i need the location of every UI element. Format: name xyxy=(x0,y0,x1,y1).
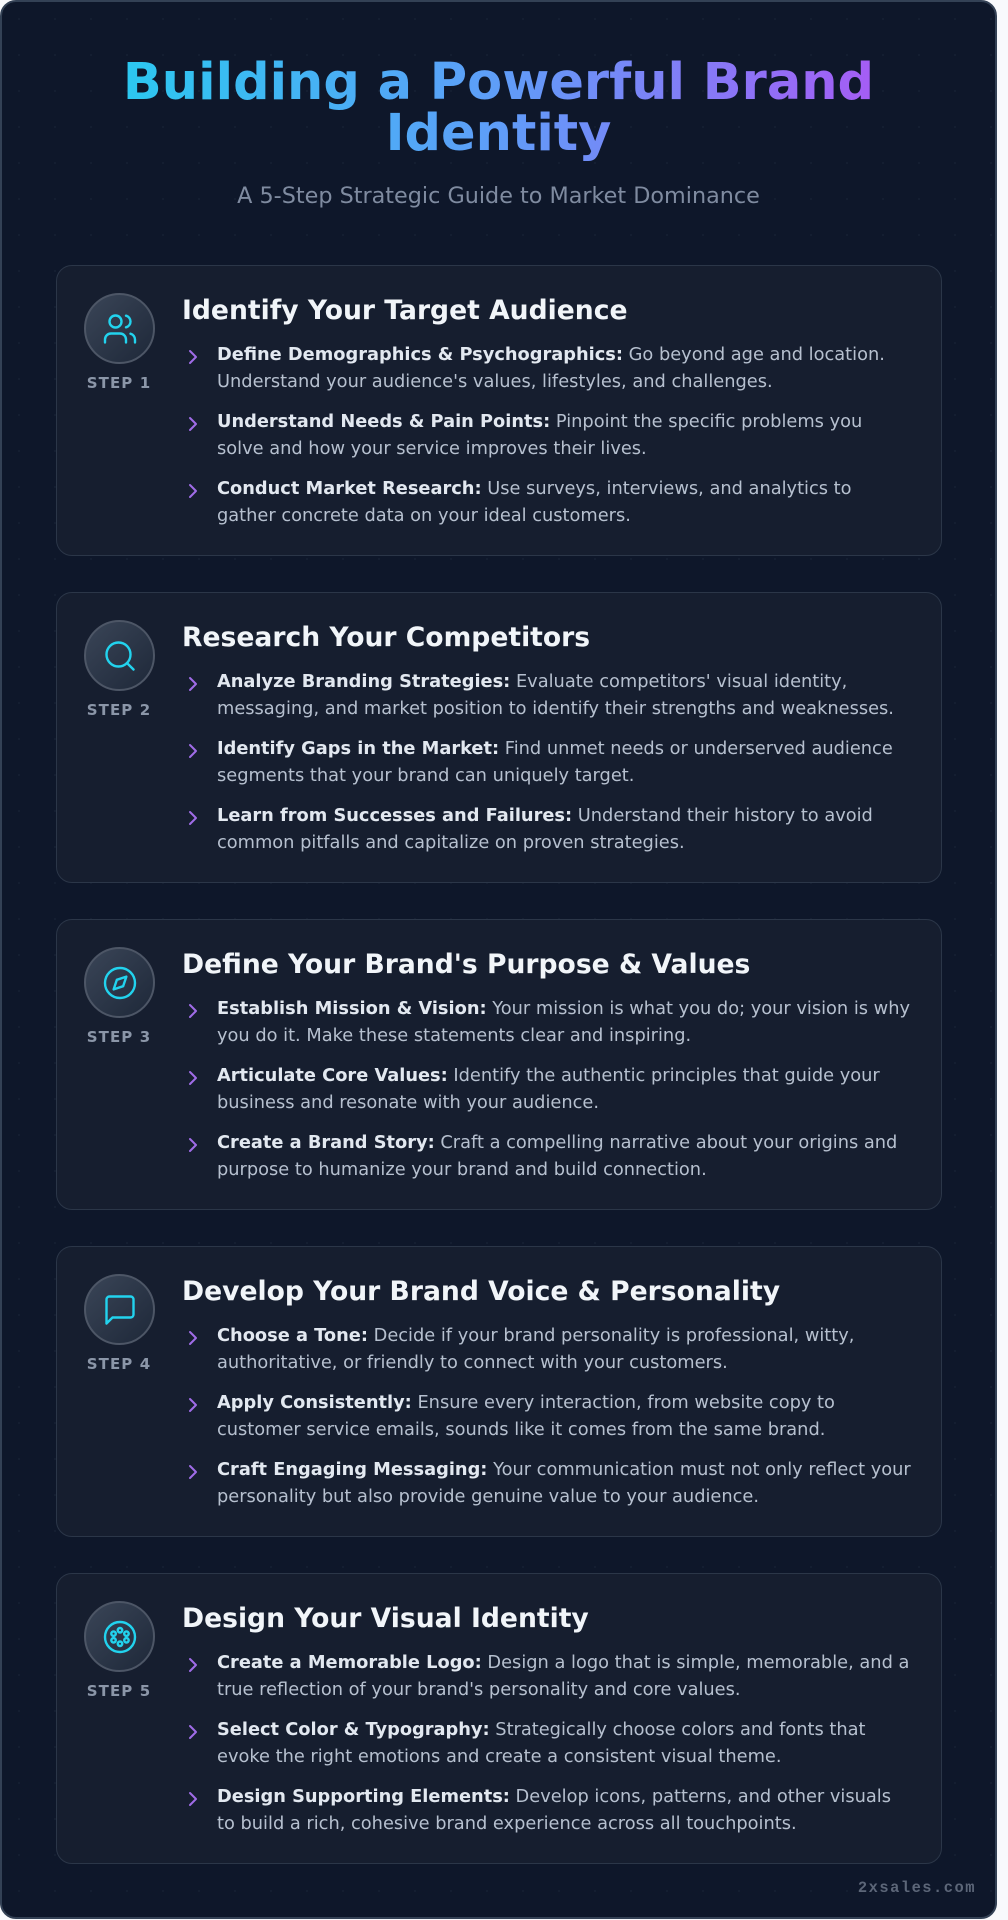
bullet text: segments that your brand can uniquely target. xyxy=(217,765,634,786)
bullet chevron xyxy=(189,1071,197,1085)
bullet text: Create a Memorable Logo: Design a logo that is simple, memorable, and a xyxy=(217,1652,909,1673)
bullet chevron xyxy=(189,677,197,691)
panel: step 2 xyxy=(56,592,942,883)
step label: STEP 1 xyxy=(87,374,151,392)
bullet chevron xyxy=(189,484,197,498)
bullet text: Design Supporting Elements: Develop icons, patterns, and other visuals xyxy=(217,1786,891,1807)
heading: Research Your Competitors xyxy=(182,622,590,653)
title: Identity xyxy=(386,104,611,163)
title: Building a Powerful Brand xyxy=(123,53,874,112)
bullet text xyxy=(217,1325,854,1373)
icon: palette xyxy=(84,1601,155,1672)
bullet text xyxy=(217,1392,835,1440)
bullet text: Establish Mission & Vision: Your mission is what you do; your vision is why xyxy=(217,998,910,1019)
bullet chevron xyxy=(189,417,197,431)
bullet chevron xyxy=(189,1331,197,1345)
bullet text xyxy=(217,1719,866,1767)
bullet text: true reflection of your brand's personality and core values. xyxy=(217,1679,741,1700)
bullet chevron xyxy=(189,1465,197,1479)
panel: step 5 xyxy=(56,1573,942,1864)
bullet text: Identify Gaps in the Market: Find unmet needs or underserved audience xyxy=(217,738,893,759)
bullet text: Understand Needs & Pain Points: Pinpoint the specific problems you xyxy=(217,411,862,432)
bullet text xyxy=(217,478,852,526)
heading: Design Your Visual Identity xyxy=(182,1603,589,1634)
step label: STEP 2 xyxy=(87,701,151,719)
bullet chevron xyxy=(189,1138,197,1152)
heading: Define Your Brand's Purpose & Values xyxy=(182,949,750,980)
bullet text: Select Color & Typography: Strategically choose colors and fonts that xyxy=(217,1719,865,1740)
bullet text xyxy=(217,1065,880,1113)
step label: STEP 4 xyxy=(87,1355,151,1373)
bullet text: solve and how your service improves their lives. xyxy=(217,438,647,459)
bullet text: Articulate Core Values: Identify the authentic principles that guide your xyxy=(217,1065,880,1086)
bullet chevron xyxy=(189,1725,197,1739)
bullet text: gather concrete data on your ideal customers. xyxy=(217,505,631,526)
bullet text: Understand your audience's values, lifestyles, and challenges. xyxy=(217,371,773,392)
bullet text: Define Demographics & Psychographics: Go beyond age and location. xyxy=(217,344,885,365)
title xyxy=(123,53,874,163)
step label: STEP 5 xyxy=(87,1682,151,1700)
heading: Develop Your Brand Voice & Personality xyxy=(182,1276,780,1307)
bullet text: Craft Engaging Messaging: Your communication must not only reflect your xyxy=(217,1459,911,1480)
bullet text: Choose a Tone: Decide if your brand personality is professional, witty, xyxy=(217,1325,854,1346)
bullet text xyxy=(217,738,893,786)
subtitle: A 5-Step Strategic Guide to Market Dominance xyxy=(237,183,760,209)
panel: step 4 xyxy=(56,1246,942,1537)
bullet chevron xyxy=(189,744,197,758)
bullet text: Apply Consistently: Ensure every interaction, from website copy to xyxy=(217,1392,835,1413)
bullet text: messaging, and market position to identify their strengths and weaknesses. xyxy=(217,698,894,719)
bullet text: Conduct Market Research: Use surveys, interviews, and analytics to xyxy=(217,478,852,499)
bullet text: authoritative, or friendly to connect with your customers. xyxy=(217,1352,728,1373)
icon: speech bubble xyxy=(84,1274,155,1345)
bullet text: purpose to humanize your brand and build connection. xyxy=(217,1159,707,1180)
bullet text xyxy=(217,1132,897,1180)
bullet text: you do it. Make these statements clear and inspiring. xyxy=(217,1025,691,1046)
panel: step 3 xyxy=(56,919,942,1210)
bullet chevron xyxy=(189,1792,197,1806)
icon: users xyxy=(84,293,155,364)
bullet text: Learn from Successes and Failures: Understand their history to avoid xyxy=(217,805,873,826)
bullet text: Create a Brand Story: Craft a compelling narrative about your origins and xyxy=(217,1132,897,1153)
bullet text xyxy=(217,1652,909,1700)
watermark: 2xsales.com xyxy=(858,1879,976,1897)
heading: Identify Your Target Audience xyxy=(182,295,628,326)
bullet text: to build a rich, cohesive brand experience across all touchpoints. xyxy=(217,1813,797,1834)
step label: STEP 3 xyxy=(87,1028,151,1046)
bullet text: business and resonate with your audience. xyxy=(217,1092,599,1113)
bullet chevron xyxy=(189,1658,197,1672)
panel: step 1 xyxy=(56,265,942,556)
bullet text xyxy=(217,671,894,719)
bullet text xyxy=(217,805,873,853)
bullet chevron xyxy=(189,811,197,825)
icon: magnifier xyxy=(84,620,155,691)
bullet text: evoke the right emotions and create a consistent visual theme. xyxy=(217,1746,782,1767)
bullet text xyxy=(217,1786,891,1834)
bullet text: customer service emails, sounds like it comes from the same brand. xyxy=(217,1419,825,1440)
bullet chevron xyxy=(189,1398,197,1412)
bullet text xyxy=(217,1459,911,1507)
icon: compass xyxy=(84,947,155,1018)
bullet chevron xyxy=(189,1004,197,1018)
bullet text xyxy=(217,998,910,1046)
bullet text xyxy=(217,411,862,459)
bullet text: personality but also provide genuine value to your audience. xyxy=(217,1486,759,1507)
bullet chevron xyxy=(189,350,197,364)
bullet text: common pitfalls and capitalize on proven strategies. xyxy=(217,832,685,853)
bullet text: Analyze Branding Strategies: Evaluate competitors' visual identity, xyxy=(217,671,847,692)
bullet text xyxy=(217,344,885,392)
